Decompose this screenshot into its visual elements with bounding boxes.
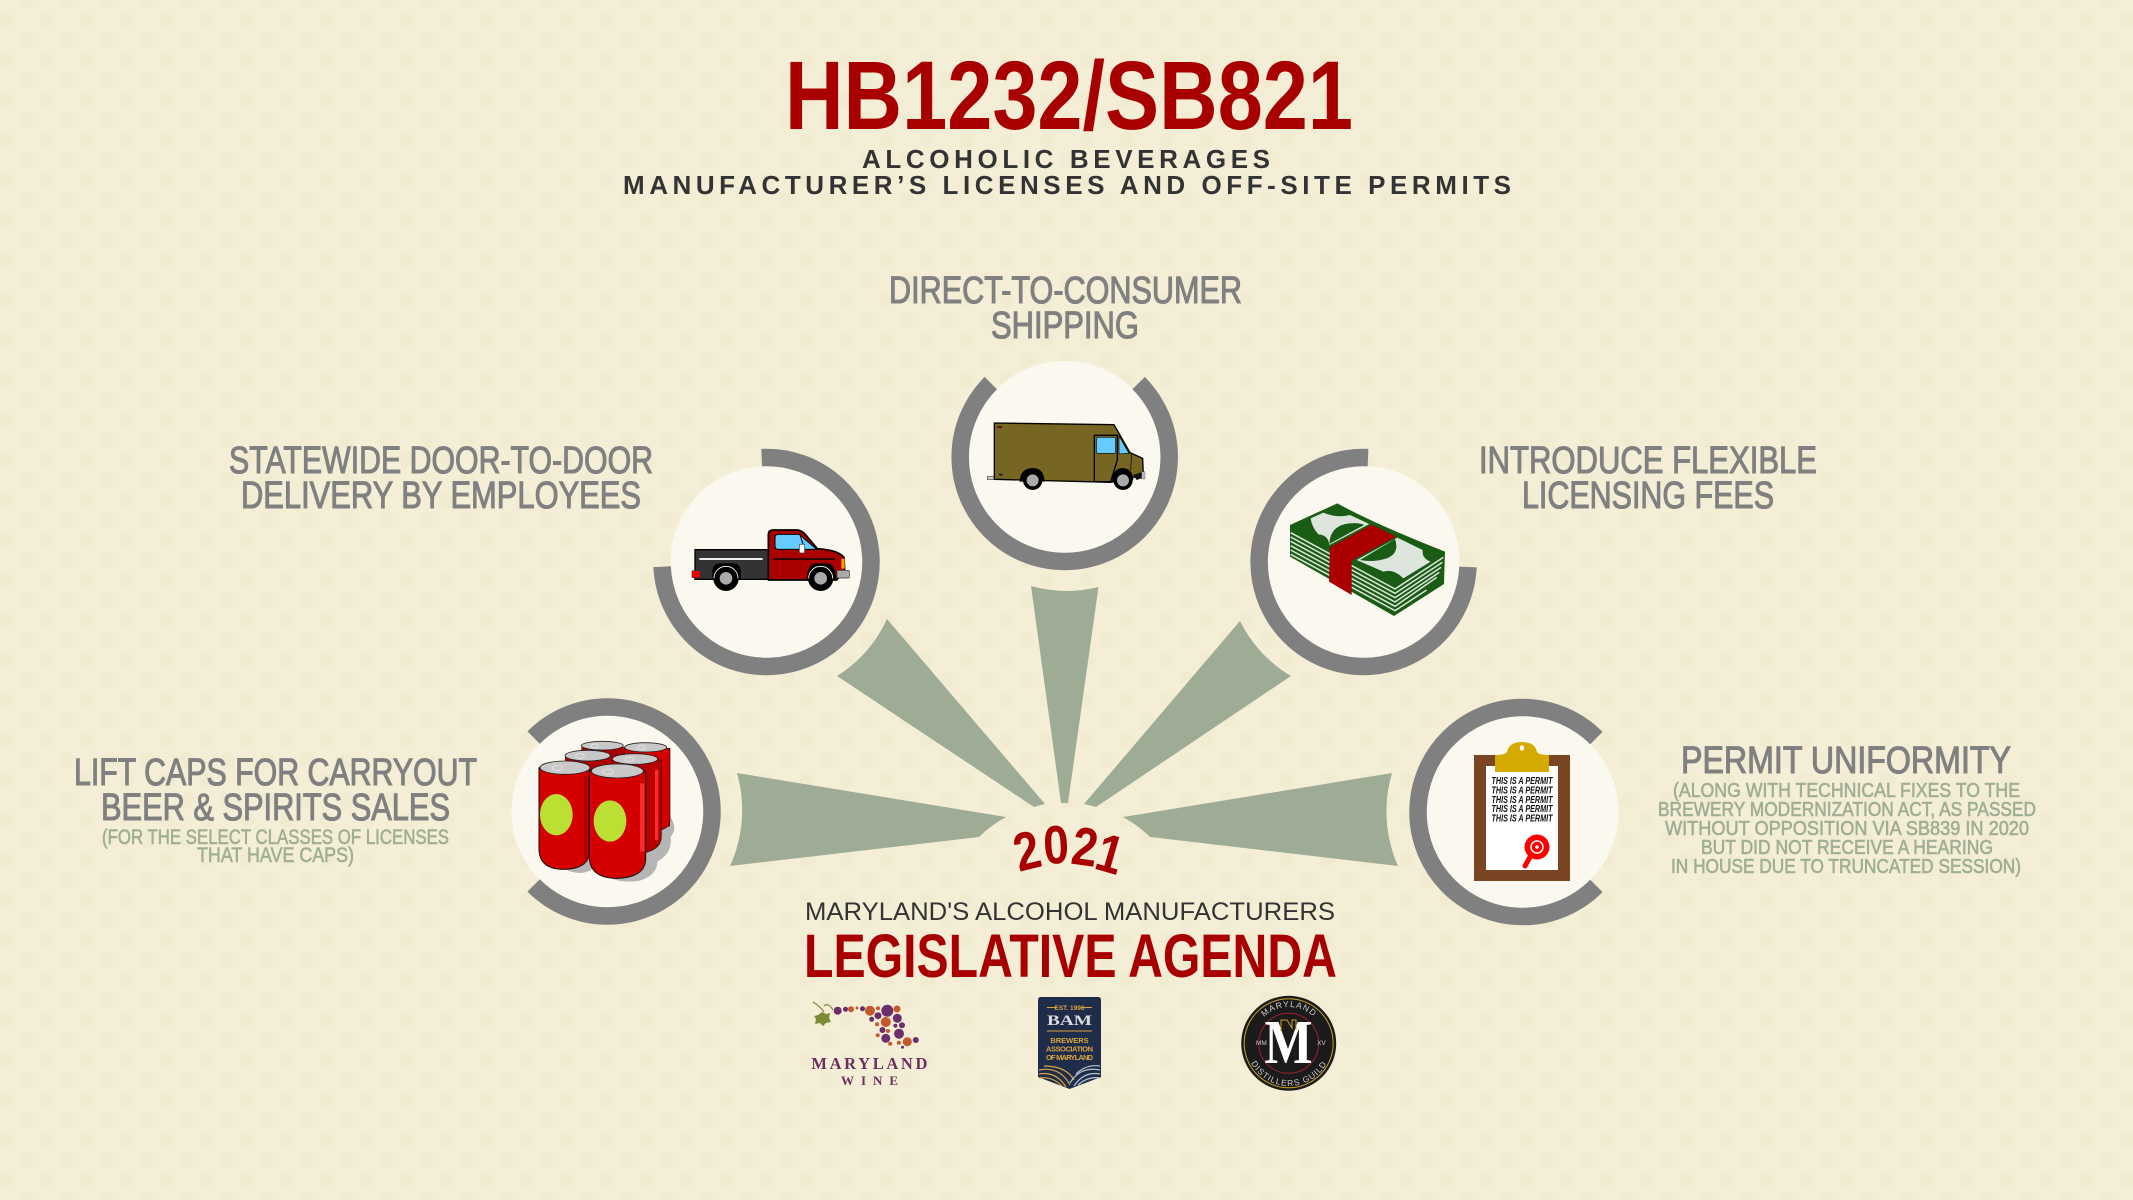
heading: lift caps: LIFT CAPS FOR CARRYOUT (74, 752, 477, 794)
logo: Brewers Association of Maryland: BAM (1047, 1013, 1092, 1029)
heading: direct-to-consumer shipping (889, 270, 1242, 347)
panel: permit icon (1418, 708, 1618, 916)
rays: fan of connector wedges (730, 586, 1398, 866)
year 2021 arched: 2 (1007, 819, 1047, 883)
heading: permit uniformity: BREWERY MODERNIZATION ACT, AS PASSED (1658, 799, 2036, 821)
panel: cans icon (512, 707, 712, 916)
logo: Maryland Distillers Guild: MM (1256, 1040, 1267, 1047)
ray to cans (730, 773, 1006, 866)
footer heading: legislative agenda: LEGISLATIVE AGENDA (804, 922, 1337, 990)
heading: permit uniformity: BUT DID NOT RECEIVE A HEARING (1701, 837, 1993, 859)
heading: statewide delivery: STATEWIDE DOOR-TO-DOOR (229, 440, 653, 482)
year 2021 arched: 1 (1089, 822, 1131, 887)
icon: clipboard permit: THIS IS A PERMIT (1492, 814, 1553, 824)
logo: Maryland Wine (811, 1002, 927, 1088)
heading: statewide delivery: DELIVERY BY EMPLOYEES (241, 475, 641, 517)
icon: clipboard permit: THIS IS A PERMIT (1492, 786, 1553, 796)
logo: Maryland Distillers Guild: DISTILLERS GUILD (1251, 1060, 1326, 1086)
logo: Maryland Distillers Guild: M (1264, 1009, 1312, 1077)
icon: clipboard permit (1474, 742, 1570, 881)
heading: permit uniformity: IN HOUSE DUE TO TRUNCATED SESSION) (1671, 856, 2021, 878)
heading: direct-to-consumer shipping: DIRECT-TO-CONSUMER (889, 270, 1242, 312)
ray to permit (1123, 773, 1398, 866)
subtitle (623, 144, 1511, 200)
subtitle: ALCOHOLIC BEVERAGES (862, 144, 1270, 174)
panel: van icon (960, 361, 1169, 561)
year 2021 arched (1007, 814, 1131, 887)
logo: Maryland Distillers Guild (1241, 996, 1336, 1091)
logo: Maryland Distillers Guild: XV (1317, 1040, 1326, 1047)
logo: Brewers Association of Maryland: BREWERS (1050, 1036, 1089, 1045)
logo: Maryland Distillers Guild: MARYLAND (1260, 1001, 1316, 1016)
logo: Maryland Wine: WINE (841, 1073, 898, 1088)
heading: statewide delivery (229, 440, 653, 517)
logo: Brewers Association of Maryland (1038, 997, 1101, 1089)
footer heading: Maryland's alcohol manufacturers: MARYLAND'S ALCOHOL MANUFACTURERS (805, 898, 1335, 926)
year 2021 arched: 0 (1042, 814, 1070, 876)
icon: clipboard permit: THIS IS A PERMIT (1492, 795, 1553, 806)
heading: flexible licensing fees: INTRODUCE FLEXIBLE (1479, 440, 1817, 482)
icon: six-pack of cans (539, 741, 674, 882)
title: HB1232/SB821 (785, 41, 1353, 150)
icon: clipboard permit: THIS IS A PERMIT (1492, 776, 1553, 787)
subtitle: MANUFACTURER’S LICENSES AND OFF-SITE PERMITS (623, 170, 1511, 200)
icon: clipboard permit: THIS IS A PERMIT (1492, 804, 1553, 815)
logo: Brewers Association of Maryland: OF MARYLAND (1046, 1053, 1094, 1062)
heading: permit uniformity: WITHOUT OPPOSITION VIA SB839 IN 2020 (1665, 818, 2029, 840)
icon: banknote stack (1290, 503, 1445, 616)
logo: Maryland Wine: MARYLAND (811, 1054, 927, 1073)
panel: truck icon (662, 457, 871, 666)
heading: lift caps (74, 752, 477, 867)
heading: direct-to-consumer shipping: SHIPPING (991, 305, 1139, 347)
logo: Brewers Association of Maryland: EST. 1996 (1054, 1005, 1085, 1012)
ray to van (1031, 586, 1098, 803)
panel: money icon (1259, 458, 1468, 667)
ray to money (1084, 621, 1291, 807)
heading: lift caps: BEER & SPIRITS SALES (101, 787, 450, 829)
icon: pickup truck (692, 530, 849, 591)
year 2021 arched: 2 (1068, 815, 1102, 879)
logo: Brewers Association of Maryland: ASSOCIATION (1046, 1044, 1093, 1054)
heading: lift caps: THAT HAVE CAPS) (197, 844, 354, 867)
heading: permit uniformity (1658, 740, 2036, 878)
heading: lift caps: (FOR THE SELECT CLASSES OF LICENSES (102, 826, 449, 849)
ray to truck (837, 619, 1045, 807)
icon: delivery van (987, 423, 1145, 490)
heading: permit uniformity: (ALONG WITH TECHNICAL FIXES TO THE (1673, 780, 2020, 802)
heading: flexible licensing fees: LICENSING FEES (1522, 475, 1774, 517)
heading: permit uniformity: PERMIT UNIFORMITY (1681, 740, 2011, 782)
heading: flexible licensing fees (1479, 440, 1817, 517)
